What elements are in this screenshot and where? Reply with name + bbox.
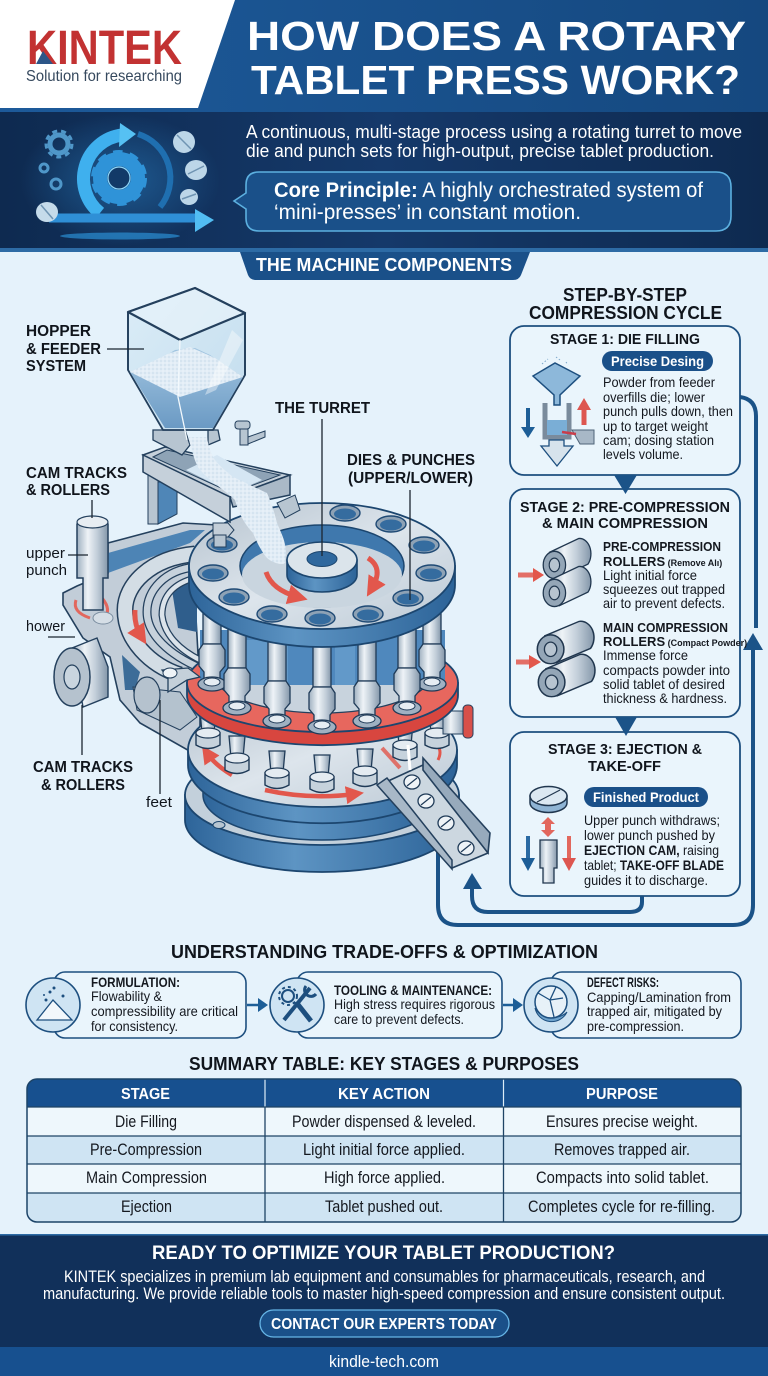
text: main compression: ROLLERS (Compact Powder)	[603, 634, 747, 649]
label: cam tracks upper: CAM TRACKS	[26, 465, 127, 482]
label: the turret: THE TURRET	[275, 400, 371, 417]
label: feet: feet	[146, 795, 172, 811]
badge: finished product: Finished Product	[593, 789, 699, 805]
label: cam tracks lower	[33, 705, 133, 794]
text: die filling description: overfills die; lower	[603, 389, 705, 405]
label: dies and punches: (UPPER/LOWER)	[348, 470, 473, 487]
footer url bar: kindle-tech.com	[329, 1353, 439, 1371]
label: feet	[146, 700, 172, 811]
label: cam tracks lower: & ROLLERS	[41, 777, 125, 794]
icon: die filling	[521, 357, 594, 466]
text: die filling description: Powder from feeder	[603, 374, 715, 390]
callout: core principle: Core Principle: A highly orchestrated system of	[274, 179, 703, 202]
icon: main compression rollers	[516, 621, 595, 697]
icon: powder pile	[26, 978, 80, 1032]
label: dies and punches: DIES & PUNCHES	[347, 452, 475, 469]
row: main compression: Main Compression	[86, 1169, 207, 1187]
text: die filling description: up to target weight	[603, 418, 708, 434]
label: hopper and feeder: SYSTEM	[26, 358, 86, 375]
row: pre-compression	[90, 1141, 690, 1159]
panel: formulation	[26, 972, 246, 1038]
panel: stage 2 compression: & MAIN COMPRESSION	[542, 515, 708, 532]
row: main compression	[86, 1169, 709, 1187]
panel: tooling and maintenance: TOOLING & MAINTENANCE:	[334, 982, 492, 998]
text: pre-compression: ROLLERS (Remove Alı)	[603, 554, 722, 569]
panel: formulation: compressibility are critical	[91, 1003, 238, 1019]
heading: the machine components: THE MACHINE COMPONENTS	[256, 255, 512, 275]
row: pre-compression: Removes trapped air.	[554, 1141, 690, 1159]
badge: precise dosing: Precise Desing	[611, 353, 704, 369]
panel: stage 3 ejection: TAKE-OFF	[588, 758, 661, 775]
row: die filling: Ensures precise weight.	[546, 1113, 698, 1131]
panel: defect risks: DEFECT RISKS:	[587, 974, 659, 990]
call to action footer	[0, 1234, 768, 1347]
label: hopper and feeder	[26, 323, 144, 375]
logo panel	[0, 0, 235, 108]
cta text	[43, 1268, 725, 1303]
text: die filling description	[603, 374, 733, 462]
callout: core principle	[234, 172, 731, 231]
icon: rotating gear with tablets	[20, 114, 220, 246]
title	[247, 13, 746, 103]
lower disk	[188, 693, 457, 823]
text: ejection description: lower punch pushed by	[584, 827, 715, 843]
panel: tooling and maintenance: care to prevent defects.	[334, 1011, 464, 1027]
title: HOW DOES A ROTARY	[247, 13, 746, 59]
icon: pre-compression rollers	[518, 538, 591, 607]
text: ejection description: tablet; TAKE-OFF BLADE	[584, 857, 724, 873]
discharge chute	[377, 745, 490, 869]
turret top plate	[189, 503, 455, 647]
central hub	[287, 542, 357, 592]
text: ejection description: EJECTION CAM, raising	[584, 842, 719, 858]
text: main compression	[603, 620, 747, 706]
heading: step-by-step compression cycle: STEP-BY-STEP	[563, 284, 687, 305]
red valve knob	[443, 705, 473, 738]
arrow: stage 1 to stage 2	[614, 475, 637, 494]
logo panel: Solution for researching	[26, 68, 182, 85]
table header row: KEY ACTION	[338, 1086, 430, 1103]
button: contact our experts	[260, 1310, 509, 1337]
panel: defect risks	[524, 972, 741, 1038]
feeder tray	[143, 421, 300, 522]
panel: stage 2 compression	[510, 489, 747, 717]
cam shoe	[162, 668, 200, 692]
row: die filling: Powder dispensed & leveled.	[292, 1113, 476, 1131]
cta heading: READY TO OPTIMIZE YOUR TABLET PRODUCTION?	[152, 1242, 615, 1264]
table header row: STAGE	[121, 1086, 170, 1103]
button: contact our experts: CONTACT OUR EXPERTS TODAY	[271, 1316, 497, 1333]
panel: defect risks: pre-compression.	[587, 1018, 684, 1034]
text: pre-compression: air to prevent defects.	[603, 595, 725, 611]
footer url bar	[0, 1347, 768, 1376]
table header row	[121, 1086, 658, 1103]
text: die filling description: cam; dosing station	[603, 432, 714, 448]
upper punches and columns	[198, 592, 446, 734]
icon: cracked tablet	[524, 978, 578, 1032]
text: main compression: MAIN COMPRESSION	[603, 620, 728, 635]
intro text	[246, 122, 742, 161]
text: pre-compression: Light initial force	[603, 567, 697, 583]
label: dies and punches	[347, 452, 475, 600]
text: main compression: thickness & hardness.	[603, 690, 727, 706]
panel: tooling and maintenance	[270, 972, 502, 1038]
lower punches	[196, 711, 449, 792]
text: pre-compression: PRE-COMPRESSION	[603, 539, 721, 554]
row: pre-compression: Pre-Compression	[90, 1141, 202, 1159]
rotation arrows	[266, 558, 377, 597]
label: upper punch: punch	[26, 562, 67, 579]
text: pre-compression	[603, 539, 725, 611]
text: ejection description: guides it to discharge.	[584, 872, 708, 888]
label: hopper and feeder: HOPPER	[26, 323, 91, 340]
row: ejection: Ejection	[121, 1198, 172, 1216]
text: die filling description: levels volume.	[603, 446, 683, 462]
icon: gear and wrench	[270, 978, 324, 1032]
heading: step-by-step compression cycle: COMPRESSION CYCLE	[529, 302, 722, 323]
rollers	[54, 638, 160, 713]
panel: formulation: for consistency.	[91, 1018, 178, 1034]
summary table	[27, 1079, 741, 1222]
cam frame	[63, 523, 230, 757]
panel: defect risks: Capping/Lamination from	[587, 989, 731, 1005]
cam tracks	[125, 554, 200, 675]
label: cam tracks upper: & ROLLERS	[26, 482, 110, 499]
heading: step-by-step compression cycle	[529, 284, 722, 323]
row: ejection: Completes cycle for re-filling.	[528, 1198, 715, 1216]
heading: trade-offs: UNDERSTANDING TRADE-OFFS & OPTIMIZATION	[171, 941, 598, 962]
heading: the machine components	[240, 252, 530, 280]
turret body	[200, 630, 445, 685]
arrow: formulation to tooling	[247, 998, 268, 1012]
header banner	[0, 0, 768, 112]
intro text: A continuous, multi-stage process using a rotating turret to move	[246, 122, 742, 142]
text: ejection description	[584, 812, 724, 888]
label: upper punch: upper	[26, 545, 65, 562]
arrow: stage 2 to stage 3	[615, 717, 637, 736]
heading: summary table: SUMMARY TABLE: KEY STAGES & PURPOSES	[189, 1053, 579, 1074]
label: upper punch	[26, 545, 88, 579]
machine labels	[26, 323, 475, 811]
machine illustration	[54, 288, 490, 872]
callout: core principle: ‘mini-presses’ in constant motion.	[274, 201, 581, 224]
panel: stage 3 ejection	[510, 732, 740, 896]
row: main compression: Compacts into solid tablet.	[536, 1169, 709, 1187]
row: ejection	[121, 1198, 715, 1216]
panel: stage 2 compression: STAGE 2: PRE-COMPRESSION	[520, 499, 730, 516]
text: ejection description: Upper punch withdraws;	[584, 812, 720, 828]
feeder stand	[148, 475, 234, 547]
text: main compression: solid tablet of desired	[603, 676, 725, 692]
panel: stage 1 die filling: STAGE 1: DIE FILLING	[550, 331, 700, 348]
label: hower: hower	[26, 619, 65, 635]
text: pre-compression: squeezes out trapped	[603, 581, 725, 597]
panel: defect risks: trapped air, mitigated by	[587, 1003, 722, 1019]
intro band	[0, 112, 768, 252]
hopper	[128, 288, 245, 440]
turret base	[185, 745, 459, 872]
powder stream	[188, 437, 286, 564]
upper punch cylinder	[77, 516, 108, 610]
text: die filling description: punch pulls down, then	[603, 403, 733, 419]
panel: formulation: FORMULATION:	[91, 974, 180, 990]
lower motion arrows	[207, 746, 440, 796]
row: die filling: Die Filling	[115, 1113, 177, 1131]
row: die filling	[115, 1113, 698, 1131]
intro text: die and punch sets for high-output, precise tablet production.	[246, 141, 714, 161]
cycle loop arrows	[438, 397, 763, 925]
text: main compression: Immense force	[603, 647, 688, 663]
label: cam tracks upper	[26, 465, 127, 518]
row: ejection: Tablet pushed out.	[325, 1198, 443, 1216]
arrow: tooling to defects	[503, 998, 523, 1012]
icon: tablet and punch	[521, 786, 576, 883]
row: pre-compression: Light initial force applied.	[303, 1141, 465, 1159]
panel: tooling and maintenance: High stress requires rigorous	[334, 996, 495, 1012]
label: hopper and feeder: & FEEDER	[26, 341, 101, 358]
panel: formulation: Flowability &	[91, 988, 163, 1004]
text: main compression: compacts powder into	[603, 662, 730, 678]
title: TABLET PRESS WORK?	[251, 57, 740, 103]
panel: stage 3 ejection: STAGE 3: EJECTION &	[548, 741, 702, 758]
logo panel: KINTEK	[27, 22, 182, 75]
row: main compression: High force applied.	[324, 1169, 445, 1187]
label: cam tracks lower: CAM TRACKS	[33, 759, 133, 776]
panel: stage 1 die filling	[510, 326, 740, 475]
table header row: PURPOSE	[586, 1086, 658, 1103]
red die table	[187, 631, 458, 745]
